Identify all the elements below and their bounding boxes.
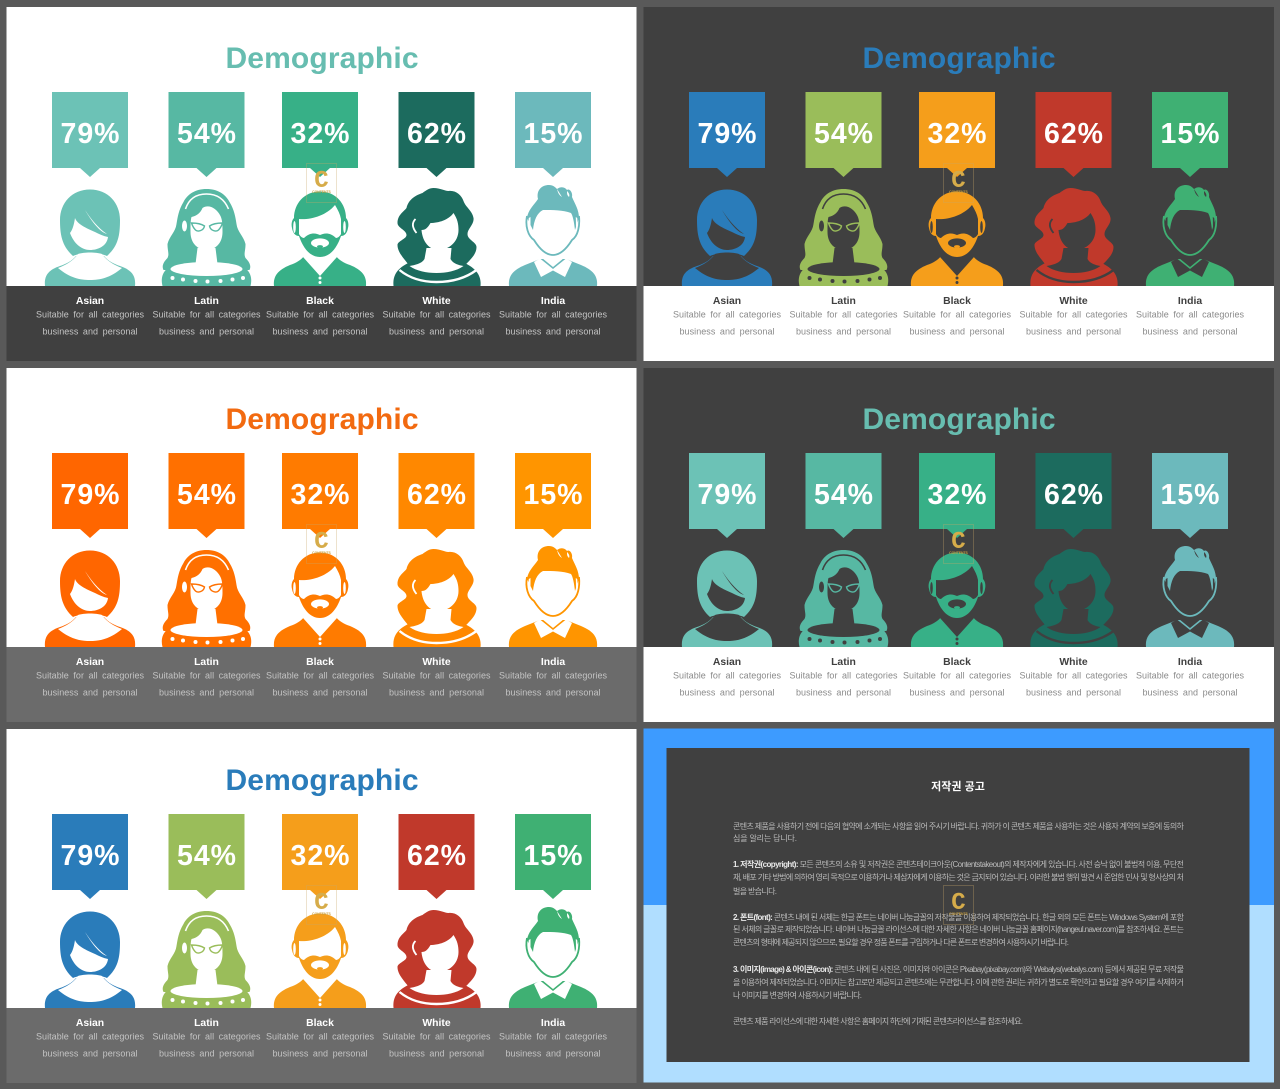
callout: 79% bbox=[52, 453, 128, 538]
labels: Latin bbox=[194, 657, 219, 668]
column: Latin bbox=[799, 453, 888, 647]
labels: Suitable for all categories bbox=[1020, 310, 1128, 320]
watermark: CONTENTS bbox=[312, 551, 332, 555]
column: Asian bbox=[45, 814, 135, 1008]
column: White bbox=[393, 814, 481, 1008]
paragraph: font: 된 서체의 글꼴로 제작되었습니다. 네이버 나눔글꼴 라이선스에 대한 자세한 사항은 네이버 나눔글꼴 홈페이지(hangeul.naver.com)를 참조하세요. 폰트는 bbox=[733, 924, 1184, 934]
icon: Black avatar bbox=[274, 192, 366, 286]
column: Latin bbox=[162, 814, 251, 1008]
column: Black bbox=[274, 453, 366, 647]
labels: Suitable for all categories bbox=[382, 670, 491, 680]
labels: Suitable for all categories bbox=[36, 310, 144, 320]
callout: 62% bbox=[398, 92, 474, 177]
value: 79% bbox=[60, 118, 120, 150]
value: 32% bbox=[290, 479, 350, 511]
column: India bbox=[509, 453, 597, 647]
value: 62% bbox=[1044, 479, 1103, 511]
value: 62% bbox=[407, 479, 466, 511]
watermark: C bbox=[314, 890, 329, 917]
icon: White avatar bbox=[393, 188, 481, 286]
callout: 79% bbox=[52, 92, 128, 177]
labels: Suitable for all categories bbox=[36, 670, 144, 680]
icon: India avatar bbox=[509, 185, 597, 286]
labels: White bbox=[422, 296, 451, 307]
heading: Demographic bbox=[226, 764, 418, 797]
heading: Demographic bbox=[862, 403, 1056, 436]
panel: copyright notice bbox=[644, 728, 1274, 1082]
labels: Suitable for all categories bbox=[499, 1032, 608, 1042]
callout: 62% bbox=[398, 453, 474, 538]
labels: Suitable for all categories bbox=[1136, 310, 1244, 320]
intro paragraph bbox=[733, 821, 1185, 843]
column: Asian bbox=[682, 92, 772, 286]
labels: Suitable for all categories bbox=[499, 310, 608, 320]
icon: Black avatar bbox=[911, 552, 1003, 647]
labels: Suitable for all categories bbox=[382, 1032, 491, 1042]
labels: business and personal bbox=[159, 326, 254, 336]
paragraph: copyright bbox=[733, 859, 1184, 896]
icon: India avatar bbox=[1146, 185, 1234, 286]
icon: White avatar bbox=[393, 549, 481, 647]
watermark: CONTENTS bbox=[949, 551, 969, 555]
watermark bbox=[944, 524, 974, 564]
callout: 15% bbox=[515, 814, 591, 899]
callout: 79% bbox=[52, 814, 128, 899]
panel: slide 1 teal on white bbox=[6, 7, 636, 361]
labels: Suitable for all categories bbox=[790, 670, 898, 680]
column: Black bbox=[911, 92, 1003, 286]
labels: Suitable for all categories bbox=[266, 670, 374, 680]
heading: Demographic bbox=[226, 403, 418, 436]
intro paragraph: 콘텐츠 제품을 사용하기 전에 다음의 협약에 소개되는 사항을 읽어 주시기 바랍니다. 귀하가 이 콘텐츠 제품을 사용하는 것은 사용자 계약의 보증에 동의하 bbox=[733, 821, 1185, 831]
labels: Suitable for all categories bbox=[266, 1032, 374, 1042]
column: Latin bbox=[162, 453, 251, 647]
labels: business and personal bbox=[506, 326, 600, 336]
labels: Suitable for all categories bbox=[1136, 670, 1244, 680]
icon: Asian avatar bbox=[45, 550, 135, 647]
value: 79% bbox=[60, 840, 120, 872]
value: 54% bbox=[177, 479, 236, 511]
column: White bbox=[1030, 92, 1118, 286]
paragraph: copyright: 재, 배포 기타 방법에 의하여 영리 목적으로 이용하거나 제삼자에게 이용하는 것은 금지되어 있습니다. 이러한 불법 행위 발견 시 준엄한 민사 및 형사상의 처 bbox=[733, 872, 1184, 882]
icon: India avatar bbox=[509, 907, 597, 1008]
column: India bbox=[1146, 92, 1234, 286]
paragraph: font: 2. 폰트(font): 콘텐츠 내에 된 서체는 한글 폰트는 네이버 나눔글꼴의 저작물을 이용하여 제작되었습니다. 한글 외의 모든 폰트는 Windows System에 포함 bbox=[733, 912, 1185, 922]
callout: 15% bbox=[1152, 453, 1228, 538]
labels: business and personal bbox=[272, 688, 368, 698]
labels: business and personal bbox=[42, 326, 138, 336]
callout: 62% bbox=[1036, 92, 1112, 177]
labels: Asian bbox=[713, 657, 741, 668]
labels: Suitable for all categories bbox=[673, 310, 782, 320]
labels: Suitable for all categories bbox=[903, 670, 1012, 680]
icon: Asian avatar bbox=[45, 190, 135, 286]
blue background upper bbox=[644, 728, 1274, 905]
label band bbox=[644, 286, 1274, 361]
column: White bbox=[393, 92, 481, 286]
label band bbox=[6, 647, 636, 722]
panel: slide 4 teal on dark bbox=[644, 368, 1274, 722]
icon: Asian avatar bbox=[682, 190, 772, 286]
callout: 54% bbox=[168, 453, 244, 538]
labels: Suitable for all categories bbox=[152, 670, 261, 680]
labels: Suitable for all categories bbox=[266, 310, 374, 320]
label band bbox=[644, 647, 1274, 722]
watermark: C bbox=[951, 168, 966, 195]
column: India bbox=[509, 92, 597, 286]
labels: White bbox=[1059, 296, 1088, 307]
labels: Suitable for all categories bbox=[36, 1032, 144, 1042]
value: 79% bbox=[698, 479, 756, 511]
callout: 54% bbox=[168, 92, 244, 177]
column: Latin bbox=[799, 92, 888, 286]
labels: business and personal bbox=[389, 326, 484, 336]
icon: Asian avatar bbox=[45, 912, 135, 1008]
labels: business and personal bbox=[1026, 326, 1121, 336]
labels: Suitable for all categories bbox=[152, 1032, 261, 1042]
panel: slide 2 multicolor on dark bbox=[644, 7, 1274, 361]
closing note: 콘텐츠 제품 라이선스에 대한 자세한 사항은 홈페이지 하단에 기재된 콘텐츠라이선스를 참조하세요. bbox=[733, 1016, 1023, 1026]
column: White bbox=[393, 453, 481, 647]
column: Black bbox=[274, 92, 366, 286]
labels: business and personal bbox=[42, 1048, 138, 1058]
labels bbox=[36, 1018, 608, 1058]
callout: 32% bbox=[919, 453, 995, 538]
column: India bbox=[1146, 453, 1234, 647]
labels: Suitable for all categories bbox=[499, 670, 608, 680]
labels: business and personal bbox=[272, 1048, 368, 1058]
watermark: CONTENTS bbox=[312, 912, 332, 916]
icon: Asian avatar bbox=[682, 550, 772, 647]
value: 15% bbox=[524, 118, 582, 150]
dark card bbox=[666, 748, 1250, 1062]
callout: 15% bbox=[515, 453, 591, 538]
value: 15% bbox=[1160, 479, 1220, 511]
value: 54% bbox=[177, 840, 236, 872]
icon: Black avatar bbox=[274, 914, 366, 1008]
callout: 62% bbox=[1036, 453, 1112, 538]
labels: India bbox=[1178, 657, 1202, 668]
value: 62% bbox=[407, 840, 466, 872]
labels: business and personal bbox=[910, 326, 1004, 336]
value: 62% bbox=[407, 118, 466, 150]
icon: Latin avatar bbox=[162, 189, 251, 286]
labels: Asian bbox=[76, 296, 104, 307]
paragraph: image and icon bbox=[733, 964, 1184, 1000]
labels: business and personal bbox=[272, 326, 368, 336]
column: Black bbox=[274, 814, 366, 1008]
labels: business and personal bbox=[389, 688, 484, 698]
column: India bbox=[509, 814, 597, 1008]
value: 54% bbox=[177, 118, 236, 150]
value: 32% bbox=[928, 479, 986, 511]
labels: business and personal bbox=[389, 1048, 484, 1058]
value: 15% bbox=[524, 840, 582, 872]
copyright title: 저작권 공고 bbox=[931, 779, 985, 793]
labels: India bbox=[1178, 296, 1202, 307]
value: 79% bbox=[60, 479, 120, 511]
labels: Asian bbox=[76, 657, 104, 668]
callout: 62% bbox=[398, 814, 474, 899]
column: Latin bbox=[162, 92, 251, 286]
heading: Demographic bbox=[862, 42, 1056, 75]
icon: India avatar bbox=[1146, 546, 1234, 647]
watermark bbox=[306, 524, 336, 564]
labels: White bbox=[422, 657, 451, 668]
watermark: C bbox=[314, 529, 329, 556]
labels: Black bbox=[306, 1018, 334, 1029]
paragraph: font bbox=[733, 912, 1185, 947]
icon: Black avatar bbox=[911, 192, 1003, 286]
icon: Black avatar bbox=[274, 552, 366, 647]
labels: business and personal bbox=[680, 326, 774, 336]
value: 15% bbox=[524, 479, 582, 511]
labels: Black bbox=[943, 657, 971, 668]
panel: slide 3 orange on white bbox=[6, 368, 636, 722]
labels: Latin bbox=[831, 657, 856, 668]
labels: business and personal bbox=[796, 326, 891, 336]
labels: Suitable for all categories bbox=[152, 310, 261, 320]
labels: Latin bbox=[194, 296, 219, 307]
labels: India bbox=[541, 296, 565, 307]
intro paragraph: 심을 알리는 답니다. bbox=[733, 833, 797, 843]
callout: 54% bbox=[168, 814, 244, 899]
value: 32% bbox=[290, 118, 350, 150]
labels: Suitable for all categories bbox=[1020, 670, 1128, 680]
label band bbox=[6, 286, 636, 361]
labels: Suitable for all categories bbox=[673, 670, 782, 680]
watermark: C bbox=[951, 890, 966, 917]
icon: Latin avatar bbox=[162, 911, 251, 1008]
slide background bbox=[6, 729, 636, 1083]
labels: business and personal bbox=[1142, 688, 1238, 698]
slide background bbox=[6, 7, 636, 361]
paragraph: image and icon: 을 이용하여 제작되었습니다. 이미지는 참고로만 제공되고 콘텐츠에는 무관합니다. 이에 관한 권리는 귀하가 별도로 확인하고 필요할 경우 여기를 삭제하거 bbox=[733, 977, 1184, 987]
icon: Latin avatar bbox=[799, 550, 888, 647]
blue background lower bbox=[644, 905, 1274, 1082]
paragraph: font: 콘텐츠의 형태에 제공되지 않으므로, 필요할 경우 정품 폰트를 구입하거나 다른 폰트로 변경하여 사용하시기 바랍니다. bbox=[733, 937, 1069, 947]
labels: Latin bbox=[194, 1018, 219, 1029]
slide background bbox=[6, 368, 636, 722]
value: 62% bbox=[1044, 118, 1103, 150]
labels: business and personal bbox=[680, 688, 774, 698]
callout: 79% bbox=[689, 453, 765, 538]
watermark bbox=[944, 164, 974, 202]
icon: White avatar bbox=[393, 910, 481, 1008]
labels: Black bbox=[943, 296, 971, 307]
labels: business and personal bbox=[159, 688, 254, 698]
callout: 79% bbox=[689, 92, 765, 177]
value: 54% bbox=[814, 118, 873, 150]
labels bbox=[673, 657, 1244, 698]
labels: Asian bbox=[76, 1018, 104, 1029]
labels: Latin bbox=[831, 296, 856, 307]
labels: business and personal bbox=[910, 688, 1004, 698]
label band bbox=[6, 1008, 636, 1083]
icon: Latin avatar bbox=[162, 550, 251, 647]
labels: Suitable for all categories bbox=[790, 310, 898, 320]
watermark: CONTENTS bbox=[312, 190, 332, 194]
labels bbox=[36, 296, 608, 336]
panel: slide 5 multicolor on white bbox=[6, 729, 636, 1083]
paragraph: copyright: 벌을 받습니다. bbox=[733, 886, 777, 896]
labels: business and personal bbox=[159, 1048, 254, 1058]
labels: Black bbox=[306, 296, 334, 307]
labels bbox=[673, 296, 1244, 336]
value: 79% bbox=[698, 118, 756, 150]
labels: business and personal bbox=[506, 688, 600, 698]
callout: 15% bbox=[515, 92, 591, 177]
labels: Suitable for all categories bbox=[903, 310, 1012, 320]
column: Black bbox=[911, 453, 1003, 647]
paragraph: copyright: 1. 저작권(copyright): 모든 콘텐츠의 소유 및 저작권은 콘텐츠테이크아웃(Contentstakeout)의 제작자에게 있습니다. 사전 승낙 없이 불법적 이용, 무단전 bbox=[733, 859, 1184, 869]
labels: White bbox=[1059, 657, 1088, 668]
callout: 32% bbox=[282, 92, 358, 177]
labels: India bbox=[541, 1018, 565, 1029]
value: 32% bbox=[290, 840, 350, 872]
icon: White avatar bbox=[1030, 549, 1118, 647]
watermark bbox=[306, 164, 336, 202]
labels: business and personal bbox=[42, 688, 138, 698]
callout: 54% bbox=[806, 453, 882, 538]
watermark bbox=[306, 886, 336, 924]
labels: business and personal bbox=[796, 688, 891, 698]
callout: 15% bbox=[1152, 92, 1228, 177]
labels: Asian bbox=[713, 296, 741, 307]
callout: 32% bbox=[282, 453, 358, 538]
icon: India avatar bbox=[509, 546, 597, 647]
value: 15% bbox=[1160, 118, 1220, 150]
paragraph: image and icon: 나 이미지를 변경하여 사용하시기 바랍니다. bbox=[733, 990, 862, 1000]
watermark: C bbox=[951, 529, 966, 556]
column: White bbox=[1030, 453, 1118, 647]
watermark: CONTENTS bbox=[949, 912, 969, 916]
labels: business and personal bbox=[1142, 326, 1238, 336]
icon: White avatar bbox=[1030, 188, 1118, 286]
column: Asian bbox=[45, 92, 135, 286]
callout: 54% bbox=[806, 92, 882, 177]
column: Asian bbox=[45, 453, 135, 647]
labels: Black bbox=[306, 657, 334, 668]
labels: business and personal bbox=[1026, 688, 1121, 698]
value: 32% bbox=[928, 118, 986, 150]
labels: White bbox=[422, 1018, 451, 1029]
labels: India bbox=[541, 657, 565, 668]
callout: 32% bbox=[919, 92, 995, 177]
labels: Suitable for all categories bbox=[382, 310, 491, 320]
paragraph: image and icon: 3. 이미지(image) & 아이콘(icon): 콘텐츠 내에 된 사진은, 이미지와 아이콘은 Pixabay(pixabay.com)와 Webalys(webalys.com) 등에서 제공된 무료 저작물 bbox=[733, 964, 1184, 974]
labels: business and personal bbox=[506, 1048, 600, 1058]
watermark bbox=[944, 886, 974, 924]
watermark: CONTENTS bbox=[949, 190, 969, 194]
heading: Demographic bbox=[226, 42, 418, 75]
labels bbox=[36, 657, 608, 698]
value: 54% bbox=[814, 479, 873, 511]
slide background bbox=[644, 368, 1274, 722]
callout: 32% bbox=[282, 814, 358, 899]
icon: Latin avatar bbox=[799, 189, 888, 286]
column: Asian bbox=[682, 453, 772, 647]
watermark: C bbox=[314, 168, 329, 195]
slide background bbox=[644, 7, 1274, 361]
